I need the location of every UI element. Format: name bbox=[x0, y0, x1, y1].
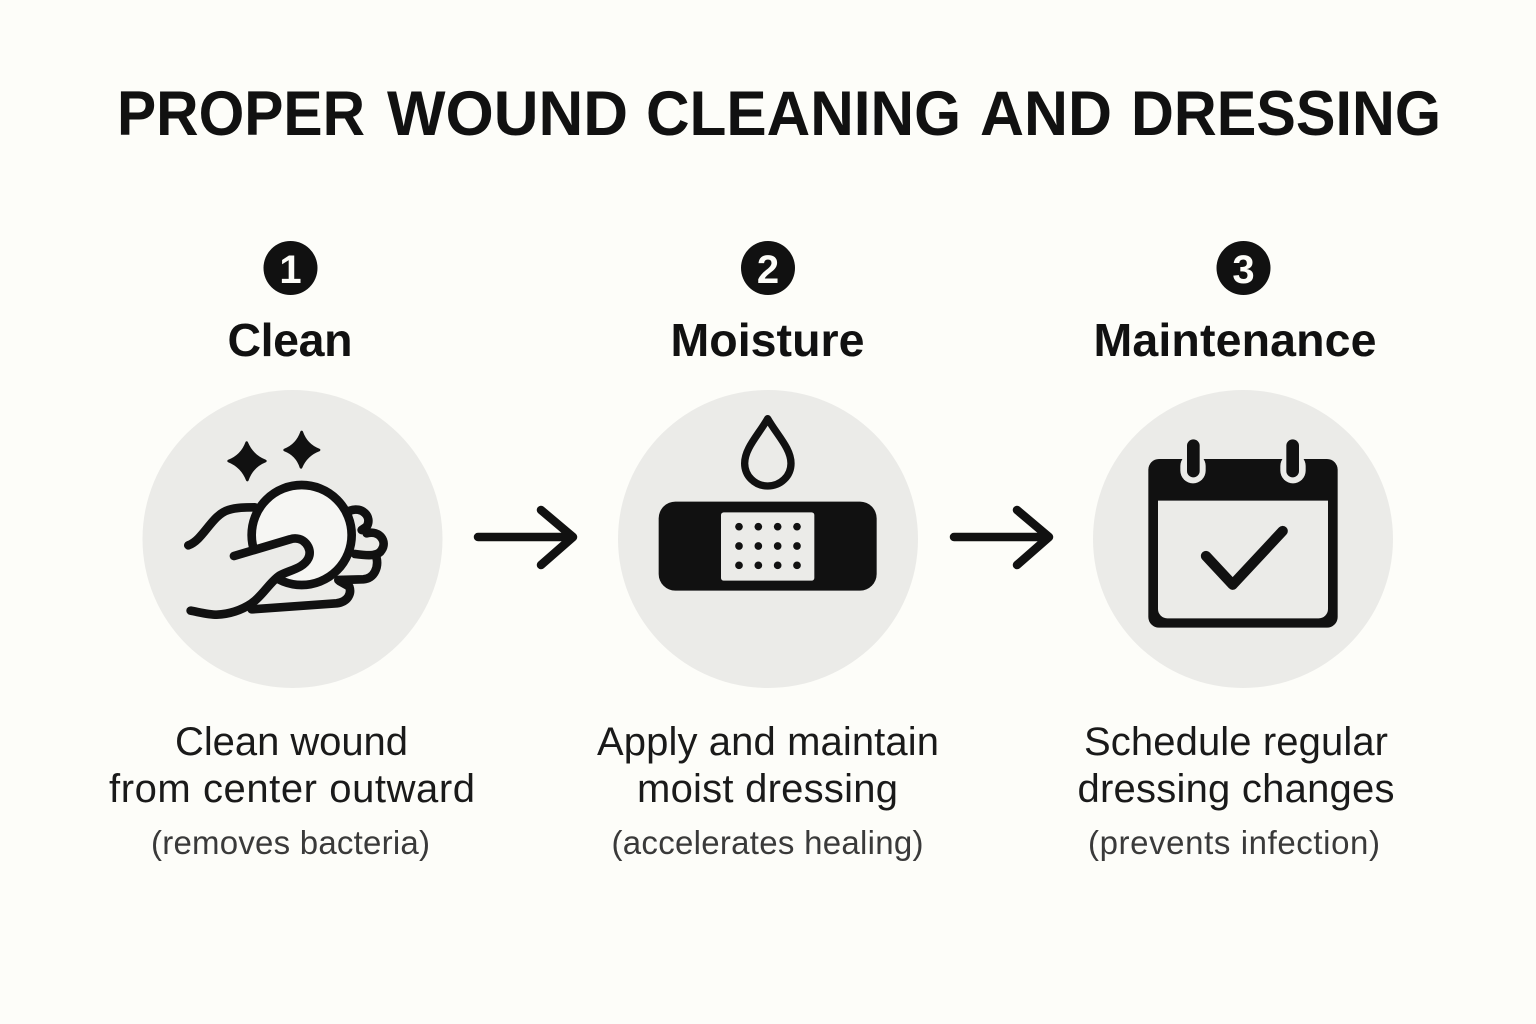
icon: water drop and bandage bbox=[659, 419, 877, 591]
step 2 description: Apply and maintain bbox=[597, 720, 939, 764]
step 3 number badge bbox=[1216, 241, 1270, 295]
step 2 description bbox=[597, 720, 939, 861]
step 1 heading: Clean bbox=[228, 314, 352, 366]
arrow 1 bbox=[478, 510, 573, 565]
title: CLEANING bbox=[646, 79, 961, 149]
step 1 description: Clean wound bbox=[175, 720, 408, 764]
step 2: moisture bbox=[597, 241, 939, 861]
title: PROPER bbox=[117, 79, 365, 149]
title: WOUND bbox=[387, 79, 628, 149]
arrow 2 bbox=[954, 510, 1049, 565]
step 3 description: (prevents infection) bbox=[1088, 824, 1380, 861]
step 1 description bbox=[109, 720, 475, 861]
step 3: maintenance bbox=[1078, 241, 1394, 861]
step 1 description: (removes bacteria) bbox=[151, 824, 430, 861]
step 2 description: moist dressing bbox=[637, 767, 898, 811]
title: AND bbox=[980, 79, 1112, 149]
step 2 circle background bbox=[618, 390, 918, 688]
step 2 description: (accelerates healing) bbox=[612, 824, 924, 861]
title bbox=[117, 79, 1441, 149]
step 2 heading: Moisture bbox=[670, 314, 864, 366]
step 1 description: from center outward bbox=[109, 767, 475, 811]
step 3 circle background bbox=[1093, 390, 1393, 688]
step 2 number badge bbox=[741, 241, 795, 295]
step 1 circle background bbox=[142, 390, 442, 688]
step 3 description: Schedule regular bbox=[1084, 720, 1388, 764]
step 1: clean bbox=[109, 241, 475, 861]
step 3 number badge: 3 bbox=[1232, 248, 1255, 292]
step 3 description bbox=[1078, 720, 1394, 861]
icon: hand cleaning with pad and sparkles bbox=[188, 432, 384, 615]
step 3 heading: Maintenance bbox=[1094, 314, 1376, 366]
step 2 number badge: 2 bbox=[757, 248, 779, 292]
step 1 number badge bbox=[264, 241, 318, 295]
icon: calendar with check mark bbox=[1148, 439, 1338, 628]
title: DRESSING bbox=[1131, 79, 1441, 149]
step 3 description: dressing changes bbox=[1078, 767, 1394, 811]
step 1 number badge: 1 bbox=[279, 248, 302, 292]
